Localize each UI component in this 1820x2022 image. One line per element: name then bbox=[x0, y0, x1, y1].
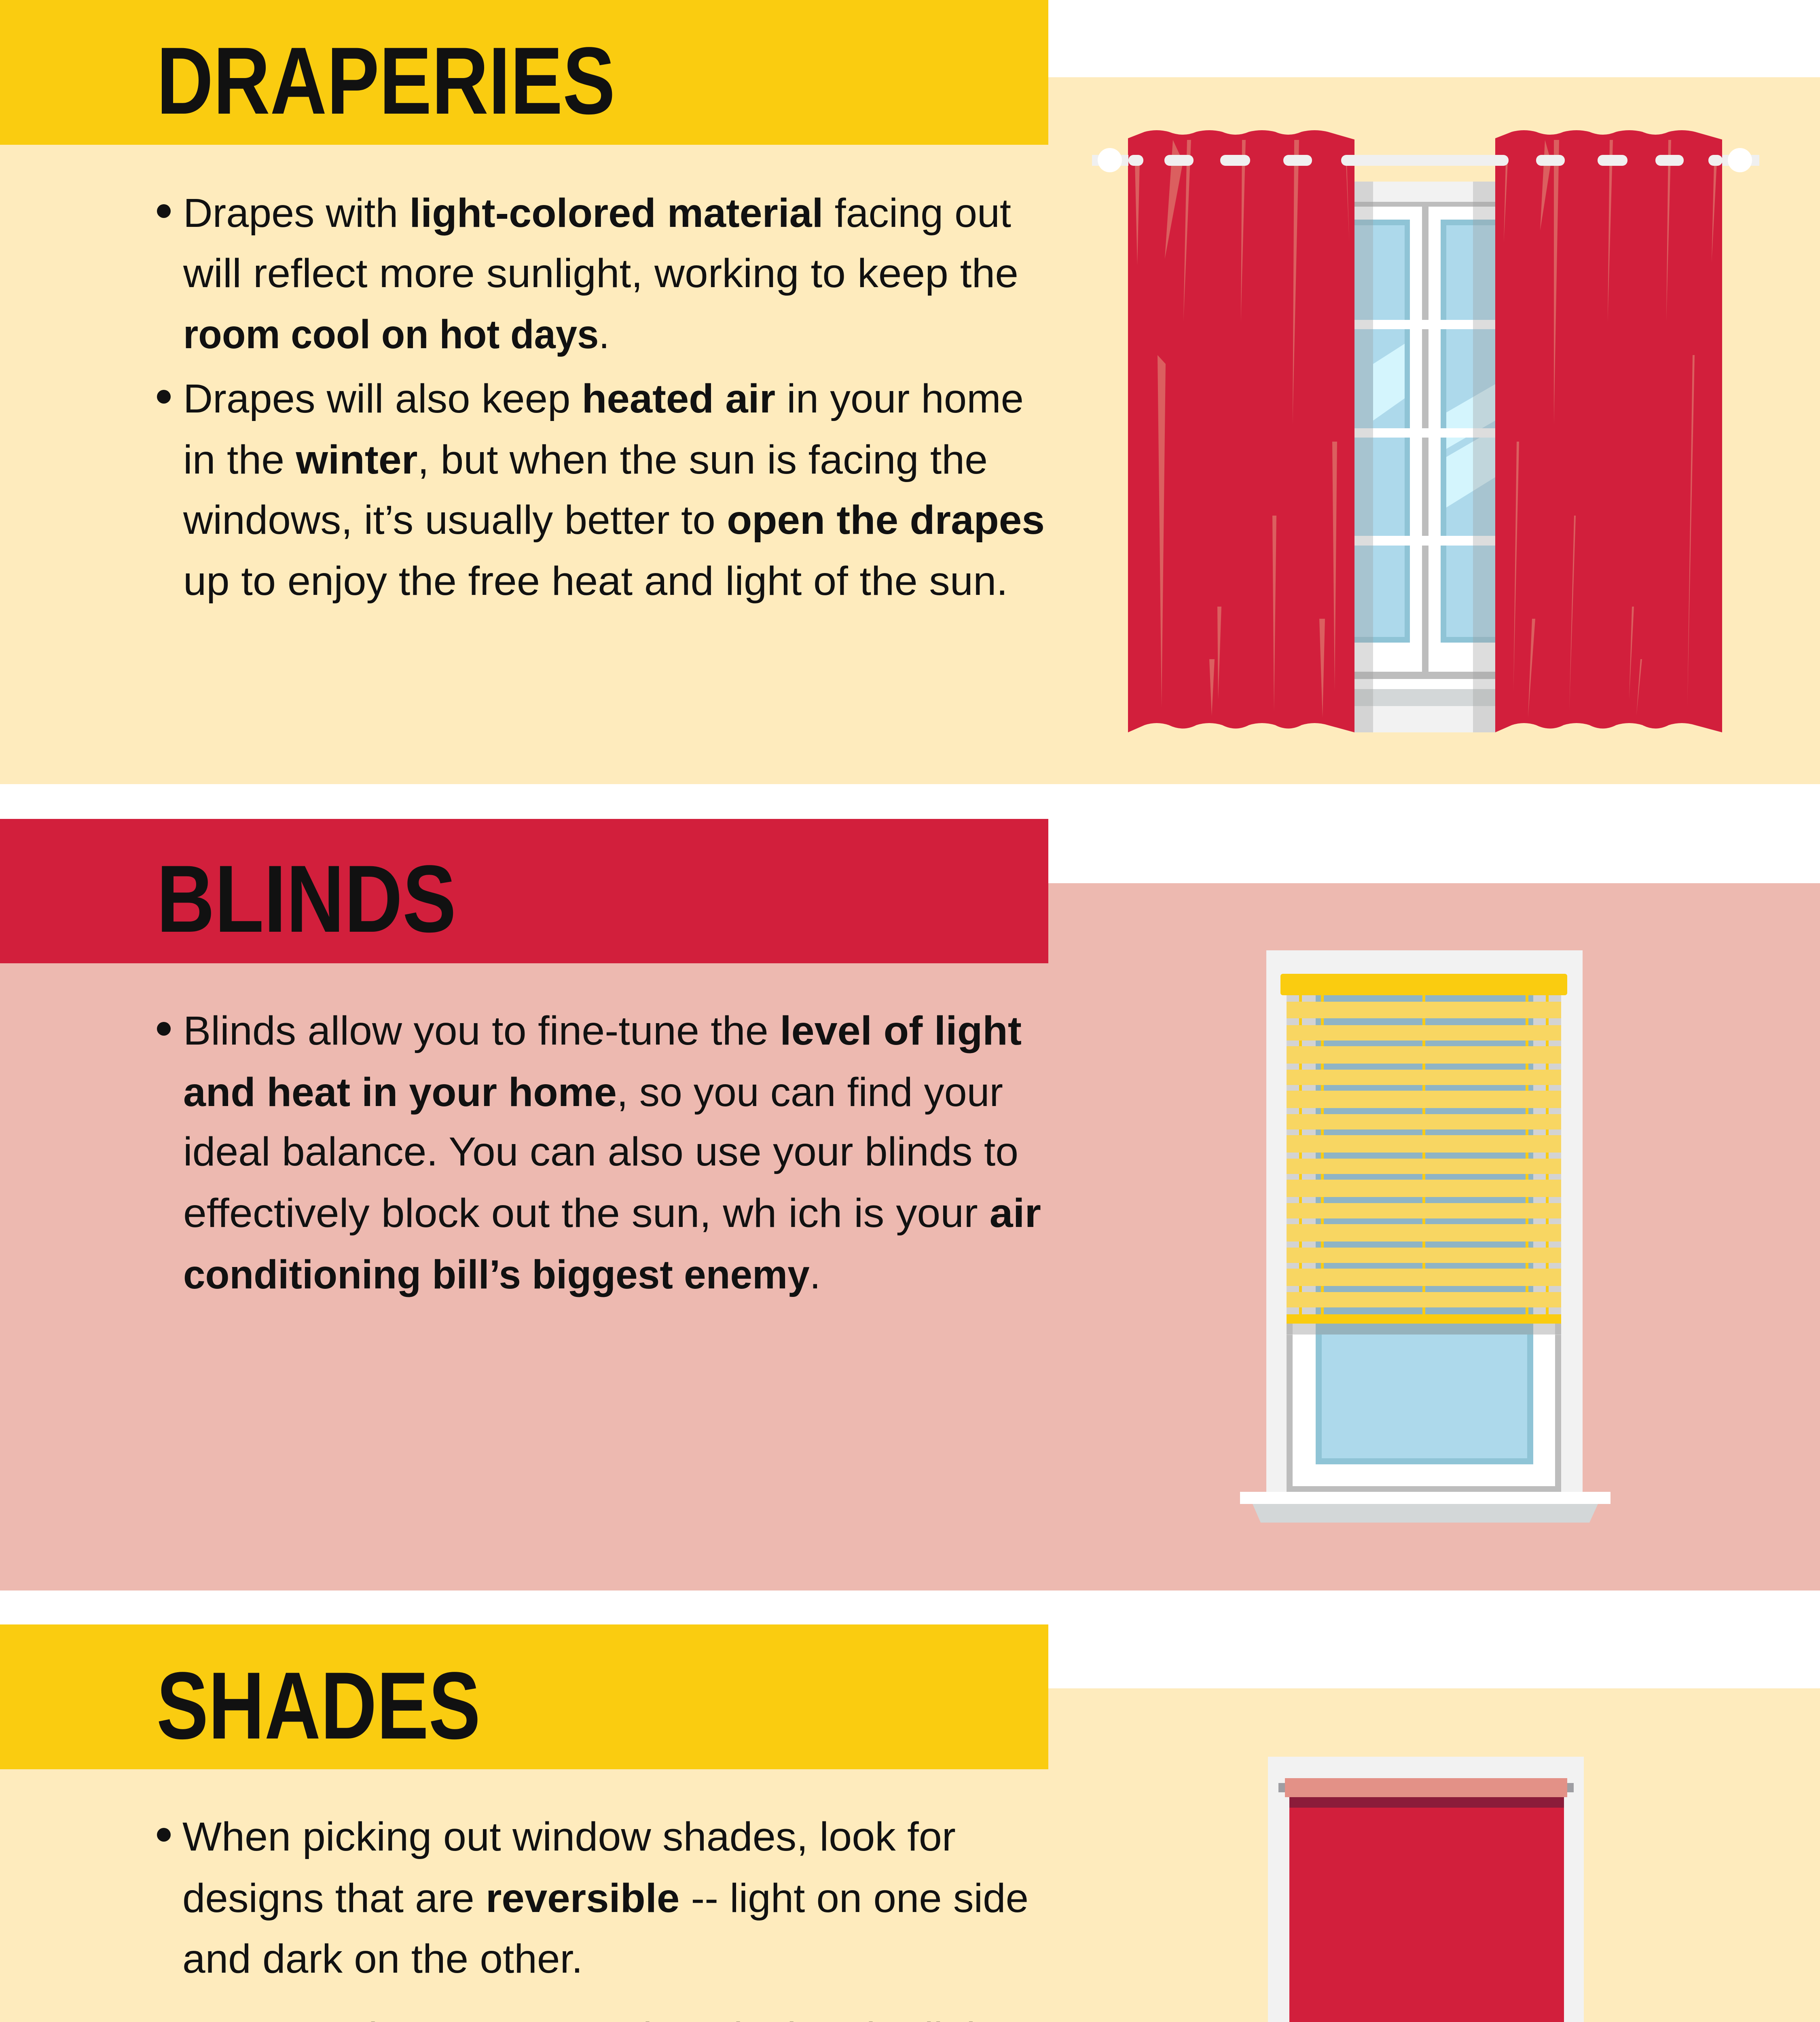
heading: draperies bbox=[0, 0, 1048, 145]
icon: curtains and window bbox=[1092, 130, 1759, 732]
text block: blinds bullet: ideal balance. You can also use your blinds to bbox=[183, 1129, 1018, 1174]
panel: shades bbox=[0, 1624, 1820, 2022]
text block: draperies bullets: windows, it’s usually better to open the drapes bbox=[183, 497, 1045, 543]
icon: window with roller shade bbox=[1240, 1757, 1610, 2022]
text block: blinds bullet: and heat in your home, so you can find your bbox=[183, 1070, 1003, 1115]
text block: shades bullets: designs that are reversible -- light on one side bbox=[182, 1876, 1029, 1921]
text block: shades bullets: When picking out window shades, look for bbox=[182, 1814, 956, 1859]
text block: draperies bullets: room cool on hot days. bbox=[183, 312, 609, 357]
text block: blinds bullet bbox=[157, 1008, 1041, 1297]
panel: draperies bbox=[0, 0, 1820, 784]
panel: blinds bbox=[0, 819, 1820, 1591]
text block: blinds bullet: conditioning bill’s biggest enemy. bbox=[183, 1252, 821, 1297]
heading: draperies: DRAPERIES bbox=[157, 27, 615, 134]
heading: blinds: BLINDS bbox=[157, 846, 456, 952]
text block: shades bullets: and dark on the other. bbox=[182, 1936, 583, 1982]
text block: draperies bullets: in the winter, but when the sun is facing the bbox=[183, 437, 988, 482]
heading: blinds bbox=[0, 819, 1048, 963]
text block: draperies bullets bbox=[157, 190, 1045, 604]
icon: window with blinds bbox=[1240, 950, 1610, 1523]
text block: draperies bullets: will reflect more sunlight, working to keep the bbox=[183, 251, 1018, 296]
text block: shades bullets bbox=[157, 1814, 1041, 2022]
text block: draperies bullets: Drapes with light-colored material facing out bbox=[183, 190, 1011, 236]
heading: shades: SHADES bbox=[157, 1652, 480, 1759]
text block: blinds bullet: effectively block out the sun, wh ich is your air bbox=[183, 1191, 1041, 1236]
text block: blinds bullet: Blinds allow you to fine-tune the level of light bbox=[183, 1008, 1022, 1053]
text block: draperies bullets: up to enjoy the free heat and light of the sun. bbox=[183, 558, 1008, 604]
text block: draperies bullets: Drapes will also keep heated air in your home bbox=[183, 376, 1024, 421]
heading: shades bbox=[0, 1624, 1048, 1769]
